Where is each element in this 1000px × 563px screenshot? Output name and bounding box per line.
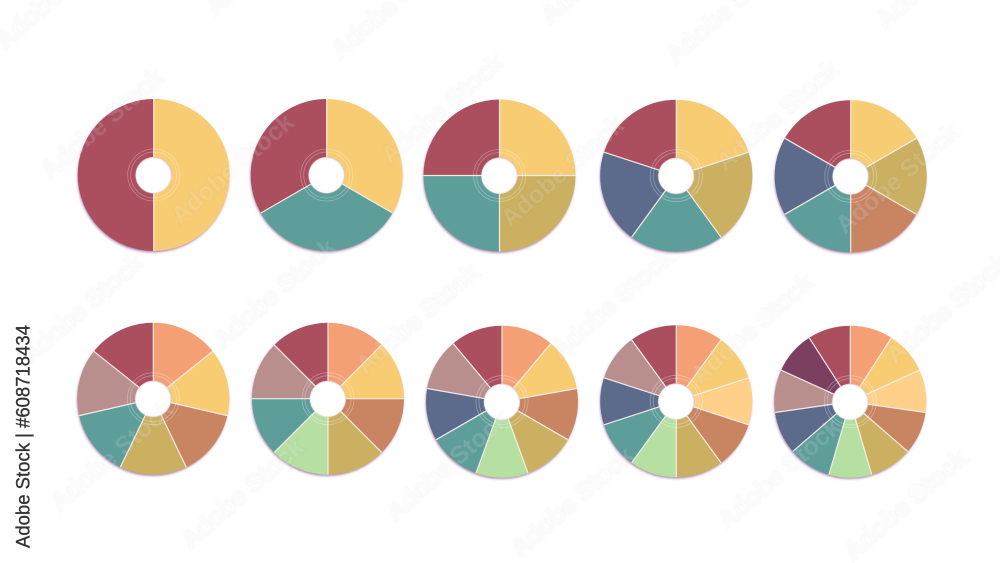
stock watermarks: Adobe Stock	[376, 48, 509, 170]
donut: 8 segments	[252, 323, 404, 476]
segments	[784, 335, 917, 468]
segments	[107, 128, 201, 222]
stock watermarks: Adobe Stock	[839, 444, 972, 563]
stock watermarks: Adobe Stock	[831, 118, 964, 240]
stock watermarks: Adobe Stock	[496, 111, 629, 233]
side credit text: Adobe Stock | #608718434	[12, 325, 34, 548]
segments	[611, 110, 742, 241]
donut: 11 segments	[774, 326, 926, 479]
donut: 6 segments	[774, 100, 926, 254]
center hole	[484, 384, 519, 420]
donut: 2 segments	[78, 99, 229, 252]
donut: 10 segments	[600, 325, 751, 478]
center hole	[658, 384, 694, 419]
center hole	[832, 384, 868, 420]
stock watermarks: Adobe Stock	[546, 243, 679, 365]
center hole	[136, 158, 171, 193]
center hole	[309, 158, 344, 193]
stock watermarks: Adobe Stock	[46, 395, 179, 517]
center hole	[135, 381, 171, 417]
stock watermarks: Adobe Stock	[686, 268, 819, 390]
stock watermarks: Adobe Stock	[381, 405, 514, 527]
segments	[87, 333, 219, 465]
stock watermarks: Adobe Stock	[176, 433, 309, 555]
segments	[611, 336, 742, 467]
stock watermarks: Adobe Stock	[506, 441, 639, 563]
donut: 5 segments	[600, 100, 751, 253]
center hole	[482, 158, 517, 194]
stock watermarks: Adobe Stock	[351, 258, 484, 380]
stock watermarks: Adobe Stock	[166, 108, 299, 230]
center hole	[310, 381, 345, 417]
donut: 7 segments	[77, 323, 228, 476]
stock watermarks: Adobe Stock	[16, 248, 149, 370]
stock watermarks: Adobe Stock	[713, 413, 846, 535]
segments	[436, 335, 568, 468]
donut: 3 segments	[251, 99, 402, 252]
segments	[262, 332, 394, 465]
donut: 9 segments	[426, 326, 577, 479]
center hole	[658, 158, 694, 194]
stock watermarks: Adobe Stock	[36, 63, 169, 185]
segments	[786, 112, 915, 241]
segments	[424, 100, 576, 252]
segments	[262, 111, 391, 239]
donut: 4 segments	[423, 100, 576, 253]
stock watermarks: Adobe Stock	[208, 233, 341, 355]
stock watermarks: Adobe Stock	[711, 55, 844, 177]
center hole	[833, 159, 868, 194]
